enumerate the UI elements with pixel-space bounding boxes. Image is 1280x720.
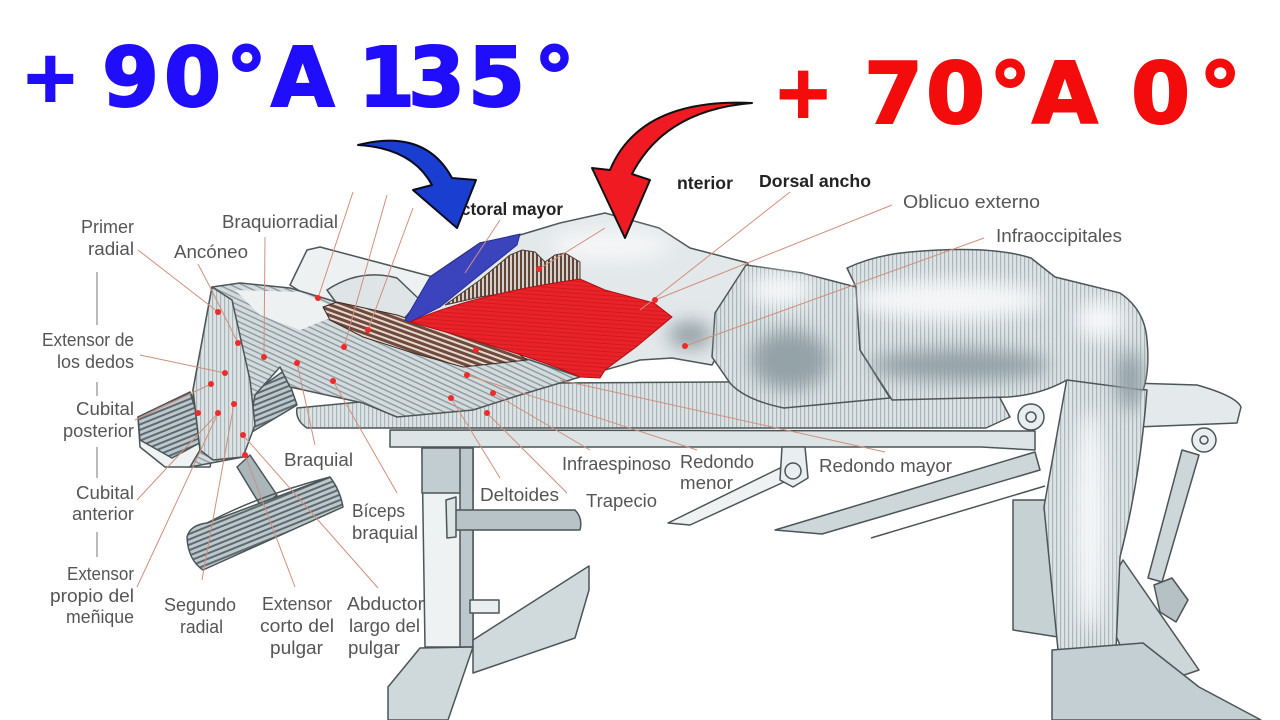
- red heading: 0°: [1131, 45, 1242, 144]
- arrow: blue: [358, 141, 476, 228]
- blue heading: 135°: [358, 31, 575, 126]
- labels: Cubital: [76, 399, 134, 419]
- figure: near leg and foot: [1044, 378, 1261, 720]
- label separators: [96, 272, 98, 557]
- labels: Primer: [81, 217, 134, 237]
- leader lines: [135, 192, 984, 588]
- bench frame: [390, 430, 1035, 450]
- red heading: 70°A: [864, 45, 1098, 144]
- labels: Infraoccipitales: [996, 226, 1122, 246]
- figure: bench pad head and face: [290, 247, 437, 320]
- labels: Segundo: [164, 595, 236, 615]
- labels: los dedos: [57, 352, 134, 372]
- figure: upper arm highlight: [235, 290, 345, 330]
- arrow: red: [592, 103, 752, 238]
- figure: arm mass: [190, 283, 580, 467]
- labels: Abductor: [347, 594, 424, 614]
- labels: largo del: [349, 616, 420, 636]
- figure: forearm: [193, 287, 255, 460]
- labels: Extensor: [67, 564, 134, 584]
- bench pivots: [780, 404, 1216, 487]
- blue heading: +: [21, 36, 80, 118]
- bench: [297, 380, 1241, 720]
- labels: ctoral mayor: [461, 199, 563, 219]
- labels: radial: [88, 239, 134, 259]
- labels: Oblicuo externo: [903, 192, 1040, 212]
- labels: posterior: [63, 421, 134, 441]
- figure: hanging plate: [138, 370, 297, 467]
- dumbbell: [187, 455, 343, 570]
- labels: anterior: [72, 504, 134, 524]
- bench post: [422, 448, 473, 647]
- muscle: triceps brown: [323, 302, 527, 367]
- red heading: +: [773, 50, 833, 134]
- labels: propio del: [50, 586, 134, 606]
- labels: Trapecio: [586, 491, 657, 511]
- muscle: blue pectoral major: [405, 234, 520, 322]
- labels: Infraespinoso: [562, 454, 671, 474]
- figure: shading: [550, 229, 1144, 630]
- bench right pad: [1100, 382, 1241, 427]
- muscle attachment dots: [195, 266, 688, 458]
- labels: Redondo: [680, 452, 754, 472]
- labels: nterior: [677, 173, 733, 193]
- muscle: serratus: [445, 250, 580, 305]
- labels: meñique: [66, 607, 134, 627]
- figure: torso: [405, 213, 748, 395]
- labels: Cubital: [76, 483, 134, 503]
- labels: Braquiorradial: [222, 212, 338, 232]
- labels: braquial: [352, 523, 418, 543]
- labels: [42, 171, 1122, 658]
- muscle: red latissimus: [410, 279, 672, 378]
- figure: shorts: [712, 265, 890, 408]
- figure: thigh: [847, 250, 1148, 400]
- labels: Ancóneo: [174, 242, 248, 262]
- labels: pulgar: [348, 638, 400, 658]
- bench rail and base: [473, 566, 589, 673]
- bench peg: [453, 510, 581, 530]
- bench rear struts: [668, 450, 1199, 690]
- labels: Dorsal ancho: [759, 171, 871, 191]
- labels: Deltoides: [480, 485, 559, 505]
- labels: pulgar: [270, 638, 323, 658]
- labels: Redondo mayor: [819, 456, 952, 476]
- labels: Extensor de: [42, 330, 134, 350]
- blue heading: 90°A: [102, 31, 335, 126]
- labels: radial: [180, 617, 223, 637]
- bench main pad: [297, 380, 1040, 428]
- labels: Bíceps: [352, 501, 405, 521]
- labels: Braquial: [284, 450, 353, 470]
- labels: Extensor: [262, 594, 332, 614]
- labels: menor: [680, 473, 733, 493]
- labels: corto del: [260, 616, 334, 636]
